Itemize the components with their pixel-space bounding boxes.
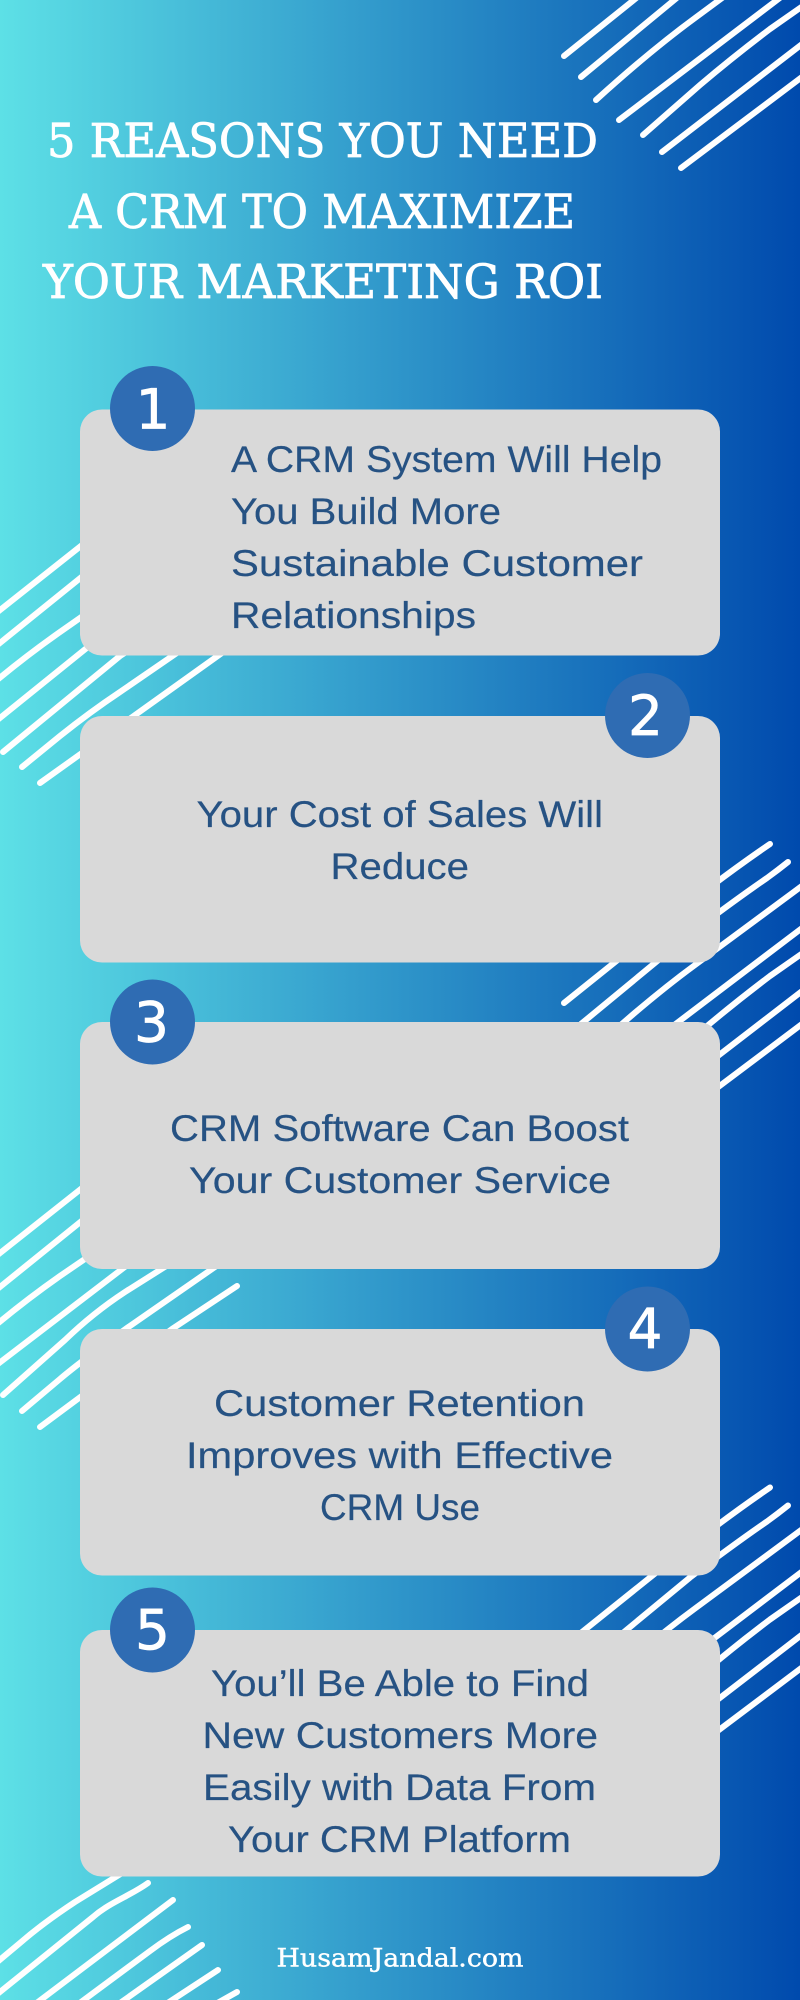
- panel: reason 1: A CRM System Will Help: [231, 438, 662, 480]
- panel: reason 5: [80, 1630, 720, 1876]
- stripes: bottom left: [0, 1862, 237, 2000]
- badge: number 2: [605, 673, 690, 758]
- badge: number 2: 2: [628, 684, 663, 748]
- panel: reason 5: New Customers More: [202, 1714, 598, 1756]
- stripes: right middle: [564, 844, 800, 1115]
- panel: reason 4: CRM Use: [320, 1486, 480, 1528]
- stripes: top right: [564, 0, 800, 168]
- panel: reason 4: Customer Retention: [214, 1382, 585, 1424]
- footer: website: HusamJandal.com: [276, 1944, 524, 1972]
- panel: reason 3: Your Customer Service: [189, 1159, 611, 1201]
- title: YOUR MARKETING ROI: [42, 255, 603, 309]
- panel: reason 2: [80, 716, 720, 962]
- panel: reason 3: CRM Software Can Boost: [170, 1107, 630, 1149]
- stripes: left upper: [0, 515, 240, 783]
- badge: number 4: [605, 1286, 690, 1372]
- badge: number 1: [110, 366, 195, 451]
- stripes: left middle: [0, 1158, 237, 1427]
- panel: reason 1: Relationships: [231, 594, 476, 636]
- badge: number 5: 5: [135, 1598, 170, 1662]
- badge: number 1: 1: [136, 378, 170, 442]
- panel: reason 5: Your CRM Platform: [228, 1818, 571, 1860]
- panel: reason 1: [80, 410, 720, 656]
- badge: number 3: 3: [134, 990, 169, 1054]
- panel: reason 4: [80, 1329, 720, 1576]
- panel: reason 1: You Build More: [231, 490, 501, 532]
- badge: number 5: [110, 1588, 195, 1672]
- panel: reason 2: Your Cost of Sales Will: [196, 793, 603, 835]
- panel: reason 2: Reduce: [330, 845, 469, 887]
- panel: reason 5: You’ll Be Able to Find: [211, 1662, 589, 1704]
- badge: number 3: [110, 980, 195, 1064]
- title: [42, 114, 603, 309]
- title: A CRM TO MAXIMIZE: [68, 185, 575, 239]
- stripes: right lower: [564, 1488, 800, 1758]
- badge: number 4: 4: [628, 1297, 662, 1361]
- panel: reason 3: [80, 1022, 720, 1269]
- panel: reason 1: Sustainable Customer: [231, 542, 643, 584]
- panel: reason 5: Easily with Data From: [203, 1766, 596, 1808]
- title: 5 REASONS YOU NEED: [47, 114, 598, 168]
- panel: reason 4: Improves with Effective: [186, 1434, 613, 1476]
